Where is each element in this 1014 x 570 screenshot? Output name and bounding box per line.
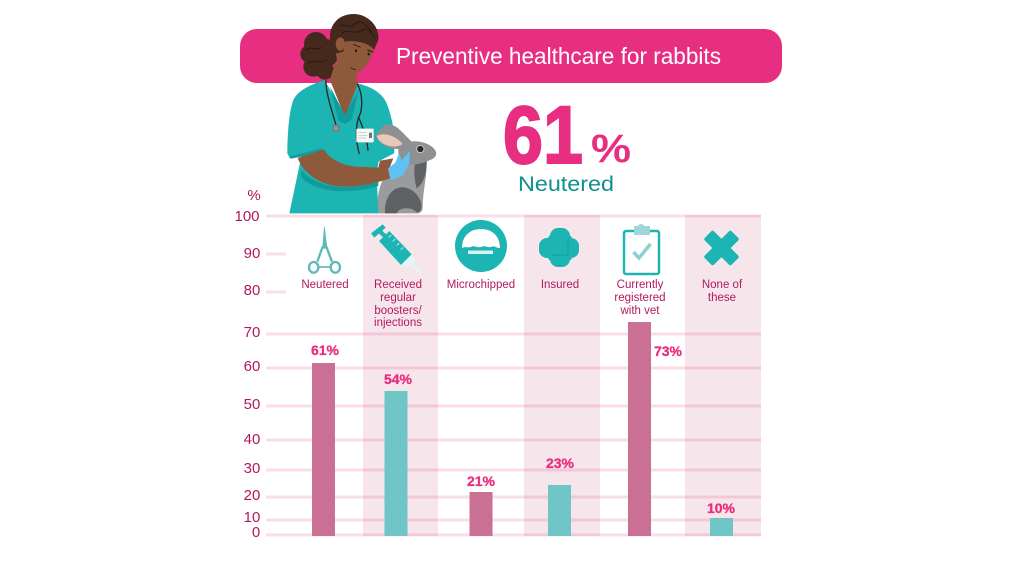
category labels: boosters/ [374, 305, 422, 317]
y axis labels: % [247, 187, 261, 204]
icon: cross mark [703, 230, 740, 266]
category labels: Insured [541, 279, 579, 291]
rabbit head [398, 141, 436, 165]
rabbit eye [417, 145, 424, 153]
illustration: vet holding rabbit [287, 14, 436, 213]
category labels: with vet [620, 305, 660, 317]
bar: neutered 61%: 61% [311, 342, 340, 358]
title banner: Preventive healthcare for rabbits [396, 43, 721, 69]
face features [351, 44, 373, 69]
y axis labels: 40 [244, 431, 260, 448]
category labels: injections [374, 317, 422, 329]
rabbit body [377, 157, 427, 213]
y axis labels: 90 [244, 245, 260, 262]
stethoscope [326, 80, 368, 154]
y axis labels: 30 [244, 460, 260, 477]
category labels: Received [374, 279, 422, 291]
ear [336, 37, 345, 51]
bar: microchipped 21%: 21% [467, 473, 496, 489]
bar: insured 23% [546, 455, 575, 536]
glove [388, 151, 410, 180]
y axis labels: 100 [234, 208, 260, 225]
icon: plaster cross [539, 228, 579, 267]
rabbit ear [376, 124, 412, 149]
bar: registered with vet 73% [628, 322, 683, 536]
scrubs shading [289, 87, 378, 191]
category labels: Microchipped [447, 279, 515, 291]
category labels: None of [702, 279, 743, 291]
bar: insured 23%: 23% [546, 455, 575, 471]
category labels: regular [380, 292, 416, 304]
key stat: 61% neutered [503, 90, 631, 196]
y axis labels [234, 187, 261, 541]
title banner [240, 29, 782, 83]
neck [330, 63, 358, 117]
bar: none of these 10% [707, 500, 736, 536]
y axis labels: 60 [244, 358, 260, 375]
top hair [330, 14, 379, 53]
category labels: Neutered [301, 279, 349, 291]
bar: boosters 54%: 54% [384, 371, 413, 387]
category labels [301, 279, 743, 329]
icon: clipboard [624, 224, 659, 274]
bar: none of these 10%: 10% [707, 500, 736, 516]
ID badge [356, 129, 374, 142]
y axis labels: 50 [244, 396, 260, 413]
y axis labels: 10 [244, 509, 260, 526]
icon: forceps [309, 227, 340, 273]
bar: registered with vet 73%: 73% [654, 343, 683, 359]
hair strands [305, 22, 375, 63]
bar: boosters 54% [384, 371, 413, 536]
key stat: 61% neutered: % [591, 127, 631, 171]
icon: microchip [455, 220, 507, 272]
y axis labels: 70 [244, 324, 260, 341]
category labels: Currently [617, 279, 664, 291]
bar: neutered 61% [311, 342, 340, 536]
key stat: 61% neutered: Neutered [518, 173, 614, 196]
y axis labels: 0 [252, 524, 260, 541]
head [336, 28, 374, 75]
scrubs [287, 80, 395, 213]
category labels: these [708, 292, 736, 304]
rabbit markings [385, 161, 427, 213]
icon: syringe [371, 224, 422, 274]
column shading bands [363, 215, 761, 536]
hair bun [300, 32, 339, 80]
key stat: 61% neutered: 61 [503, 90, 583, 181]
bar: microchipped 21% [467, 473, 496, 536]
category labels: registered [614, 292, 666, 304]
y axis labels: 20 [244, 487, 260, 504]
chart: preventive healthcare percentages [234, 187, 761, 541]
arm [298, 149, 393, 187]
y axis labels: 80 [244, 282, 260, 299]
